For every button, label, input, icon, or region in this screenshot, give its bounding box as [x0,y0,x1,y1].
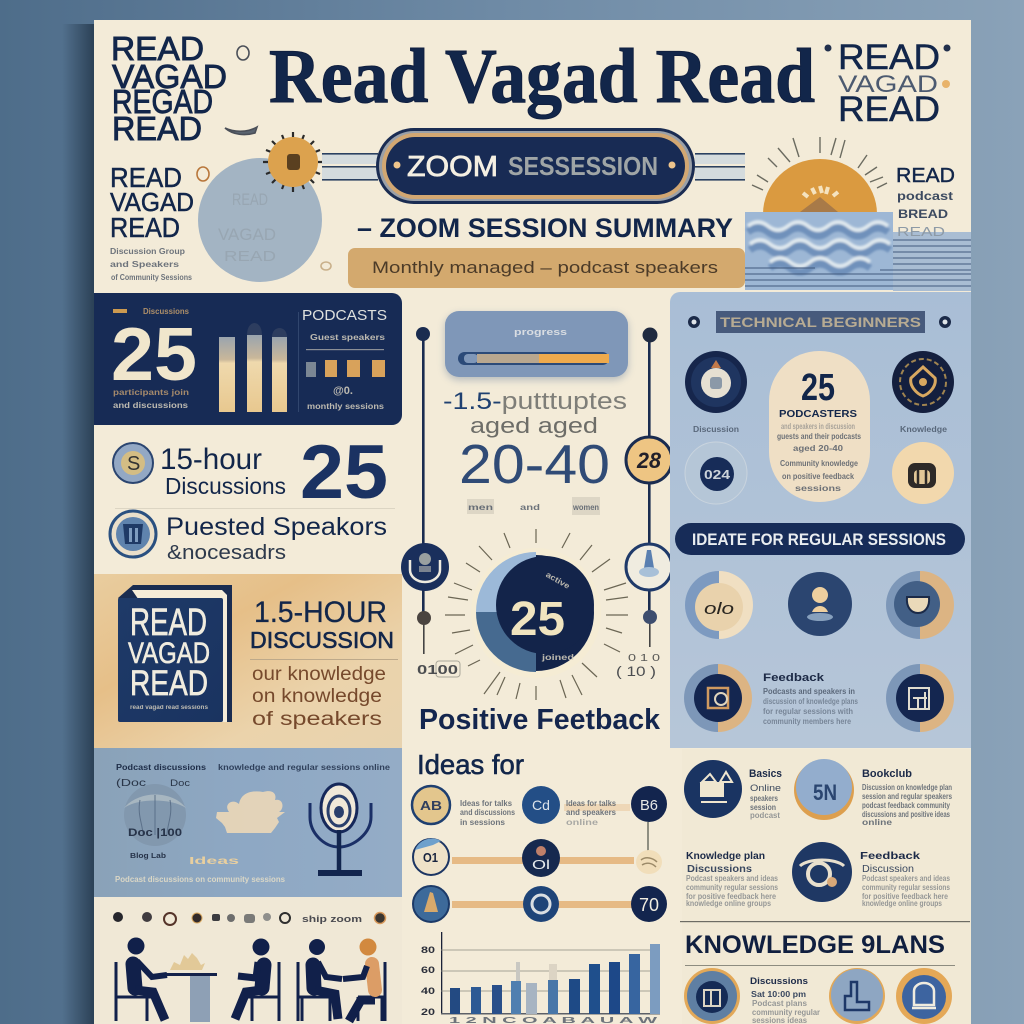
gauge: 25 participants: active [544,570,572,591]
ideas icons row 2 [684,664,752,732]
header: left wordmark stacks: READ [111,30,204,67]
icon: book: read vagad read sessions [130,705,209,711]
bar chart: three columns [219,323,287,412]
age range text block: and [520,503,540,512]
age range text block [443,388,627,515]
blue badge circle: READ [224,248,276,265]
progress card: progress [514,327,567,337]
subtitle: – ZOOM SESSION SUMMARY [357,213,733,243]
ideas connectors: online [566,818,599,827]
centre oval stat: PODCASTERS [779,409,857,420]
card: left top: session [750,803,776,812]
card: right top [794,759,952,827]
header: left wordmark stacks: REGAD [112,83,213,120]
small timeline labels: 0 1 0 [628,653,661,664]
person 3 [298,939,342,1021]
centre oval stat: 25 [801,367,835,409]
title: Read Vagad Read [269,33,815,119]
header: right wordmark stack: VAGAD [838,71,938,98]
card: middle right text: Discussion [862,864,914,875]
panel: book and discussion: DISCUSSION [250,627,394,653]
card: right top: 5N [813,780,837,805]
centre oval stat: sessions [795,484,842,493]
icon row 1: Discussion [693,425,739,434]
card: middle left text: knowledge online groups [686,899,771,908]
timeline rails [416,327,658,654]
banner: ideas for regular sessions: IDEATE FOR REGULAR SESSIONS [692,530,946,549]
centre oval stat: guests and their podcasts [777,432,861,441]
title bar [688,311,951,333]
card: left top: Online [750,783,781,793]
age range text block: women [572,503,599,512]
ideas node grid [412,786,667,922]
card: left top [684,760,782,820]
heading: positive feedback: Positive Feetback [419,704,661,736]
header: right wordmark stack: READ [838,90,940,129]
timeline node: 28 [626,437,672,483]
card: middle left text: Discussions [687,864,752,875]
panel: people band [94,897,402,1024]
gauge: 25 participants [445,529,628,700]
title bar: TECHNICAL BEGINNERS [720,314,921,330]
caption [115,856,286,884]
stat row: 1.5-hour discussions: 25 [300,430,388,515]
tan tagline bar: Monthly managed – podcast speakers [372,258,718,277]
ideas connectors [452,799,649,908]
header: left wordmark stacks: VAGAD [112,58,227,95]
plan text: Podcast plans [752,999,808,1008]
stat row: guest speakers: Puested Speakors [166,513,387,541]
icon row: ship zoom [302,914,362,924]
person 2 [235,938,279,1021]
icon row [113,912,386,925]
ideas connectors: Ideas for talks [566,799,617,808]
icon: book [118,585,232,722]
plan text: Sat 10:00 pm [751,990,806,999]
panel: book and discussion: 1.5-HOUR [254,596,387,629]
centre oval stat: aged 20-40 [793,444,844,453]
blue badge circle: VAGAD [218,225,276,244]
heading: ideas for: Ideas for [417,749,524,780]
feedback text block: for regular sessions with [763,707,853,716]
plan text [750,976,820,1024]
caption: Podcast discussions on community sessions [115,875,286,884]
icon: globe: Blog Lab [130,853,166,860]
header: left wordmark stacks: READ [112,110,202,147]
ideas connectors: and discussions [460,808,515,817]
bar chart: growth: 40 [421,986,435,996]
icon: microphone [310,784,371,873]
panel: podcast microphone: knowledge and regular sessions online [218,763,391,772]
heading: knowledge plans: KNOWLEDGE 9LANS [685,931,945,959]
panel: podcast microphone: (Doc [116,778,146,789]
card: right top: podcast feedback community [862,801,950,810]
header: left wordmark stacks: of Community Sessions [111,273,192,282]
feedback text block: Feedback [763,672,825,684]
centre oval stat: Community knowledge [780,459,858,468]
tan tagline bar [348,248,745,288]
ideas connectors: in sessions [460,818,506,827]
centre oval stat: and speakers in discussion [781,422,855,431]
panel: navy stats: PODCASTS [302,307,387,324]
feedback text block: discussion of knowledge plans [763,697,858,706]
card: right top: discussions and positive ideas [862,810,950,819]
age range text block: men [468,503,493,512]
header: right small text: podcast [897,189,953,203]
person 4 [343,938,385,1021]
panel: podcast microphone [94,748,402,897]
stat row: 1.5-hour discussions: Discussions [165,473,286,499]
age range text block: 20-40 [459,433,610,495]
gauge: 25 participants: joined [541,653,574,662]
feedback text block: Podcasts and speakers in [763,687,855,696]
header: right small text: BREAD [898,207,948,221]
ideas node grid: Ol [532,857,550,872]
card: middle left text: community regular sessions [686,883,778,892]
icon: cloud [216,791,285,833]
card: middle left text: Knowledge plan [686,851,765,862]
card: left top: speakers [750,794,778,803]
header: left wordmark stacks: and Speakers [110,260,180,269]
panel: podcast microphone: Doc [170,778,191,788]
header: left wordmark stacks: READ [110,162,182,193]
icon: book: READ [130,602,207,644]
ideas node grid: Cd [532,797,550,813]
progress card [445,311,628,380]
icon row 1 [685,351,747,434]
ideas connectors: and speakers [566,808,617,817]
icon: plan one [684,968,740,1024]
timeline node: right icon [626,544,672,590]
stat row: 1.5-hour discussions [113,430,388,515]
header: left wordmark stacks: READ [110,212,180,243]
header: right wordmark stack: READ [838,38,940,77]
plan text: Discussions [750,976,808,986]
card: left top: podcast [750,811,780,820]
stat row: 1.5-hour discussions: 15-hour [160,443,262,476]
panel: book and discussion: on knowledge [252,686,382,707]
card: middle left text: Podcast speakers and ideas [686,874,778,883]
card: middle right text: for positive feedback here [862,892,948,901]
blue badge circle: READ [232,190,268,209]
icon: plan two [829,968,885,1024]
timeline node: 28: 28 [636,448,662,473]
card: middle left text: for positive feedback here [686,892,776,901]
panel: navy stats: monthly sessions [307,402,385,411]
icon: globe: Doc |100 [128,827,182,839]
caption: Ideas [189,856,240,867]
bar chart: growth: 20 [421,1007,435,1017]
panel: navy stats: and discussions [113,401,189,410]
ideas icons row 1: olo [704,599,734,618]
feedback text block [763,672,858,726]
panel: navy stats: Discussions [143,307,190,316]
centre oval stat [769,351,870,502]
card: middle right text: Podcast speakers and ideas [862,874,950,883]
icon: globe [124,784,186,860]
plan text: community regular [752,1008,820,1017]
card: left top: Basics [749,768,782,780]
card: middle right text: community regular sessions [862,883,950,892]
panel: navy stats: 25 [111,312,197,396]
card: middle right text [860,851,950,908]
panel: navy stats: participants join [113,388,189,397]
icon: book: VAGAD [128,637,210,670]
icon row 2 [685,442,747,504]
header: right small text: READ [897,224,945,239]
panel: blue sessions [670,292,971,748]
pill connector lines [322,153,745,181]
timeline node: left icon [401,543,449,591]
small timeline labels: 0100 [417,662,458,677]
stat row: guest speakers [110,511,387,564]
small timeline labels: ( 10 ) [616,663,656,679]
panel: right-column feature cards [680,749,971,1024]
ideas connectors: Ideas for talks [460,799,513,808]
icon row 2: 024 [704,467,731,482]
panel: navy stats [94,293,402,425]
panel: navy stats: @0. [333,385,353,397]
zoom sessions pill: ZOOM [407,151,498,183]
card: right top: Bookclub [862,768,912,780]
ideas node grid: B6 [640,797,658,814]
stat row: guest speakers: &nocesadrs [167,542,286,564]
card: right top: Discussion on knowledge plan [862,783,952,792]
header: left wordmark stacks: VAGAD [110,187,194,217]
card: middle right text: knowledge online groups [862,899,942,908]
table with flowers [160,953,217,1022]
header: right small text [896,165,955,239]
age range text block: -1.5- putttuptes [443,388,627,415]
bar chart: growth: 60 [421,965,435,975]
card: right top: online [862,818,893,827]
sun icon [263,132,323,192]
sunrise and waves illustration [745,137,971,291]
stat row: 1.5-hour discussions: S [127,453,140,475]
feedback text block: community members here [763,717,851,726]
bar chart: growth: 80 [421,945,435,955]
zoom sessions pill [376,128,695,204]
header: left wordmark stacks [110,30,227,282]
icon: book: READ [130,664,208,703]
centre oval stat: on positive feedback [782,472,854,481]
ideas node grid: O1 [423,850,438,865]
gauge: 25 participants: 25 [510,593,565,646]
panel: book and discussion: our knowledge [252,664,386,685]
header: left wordmark stacks: Discussion Group [110,247,185,256]
card: middle left text [686,851,778,908]
panel: podcast microphone: Podcast discussions [116,763,207,772]
ideas icons row 1 [685,571,753,639]
card: middle icon [792,842,852,902]
banner: ideas for regular sessions [675,523,965,555]
panel: book and discussion: of speakers [252,709,382,730]
card: middle right text: Feedback [860,851,921,862]
small decorative header icons [197,46,331,270]
zoom sessions pill: SESSESSION [508,151,658,181]
poster shadow [62,24,94,1024]
ideas node grid: AB [420,798,442,813]
age range text block: aged aged [470,413,598,438]
header: right small text: READ [896,165,955,187]
small timeline labels [417,653,661,679]
panel: blue sessions: Knowledge [900,425,948,434]
ideas node grid: 70 [639,895,659,915]
bar chart: growth [421,932,660,1024]
card: right top: session and regular speakers [862,792,952,801]
icon: plan three [896,968,952,1024]
panel: book and discussion [94,574,402,748]
person 1 [116,938,167,1021]
header: right wordmark stack [824,38,950,129]
blue badge circle [198,158,322,282]
panel: navy stats: Guest speakers [310,333,386,342]
